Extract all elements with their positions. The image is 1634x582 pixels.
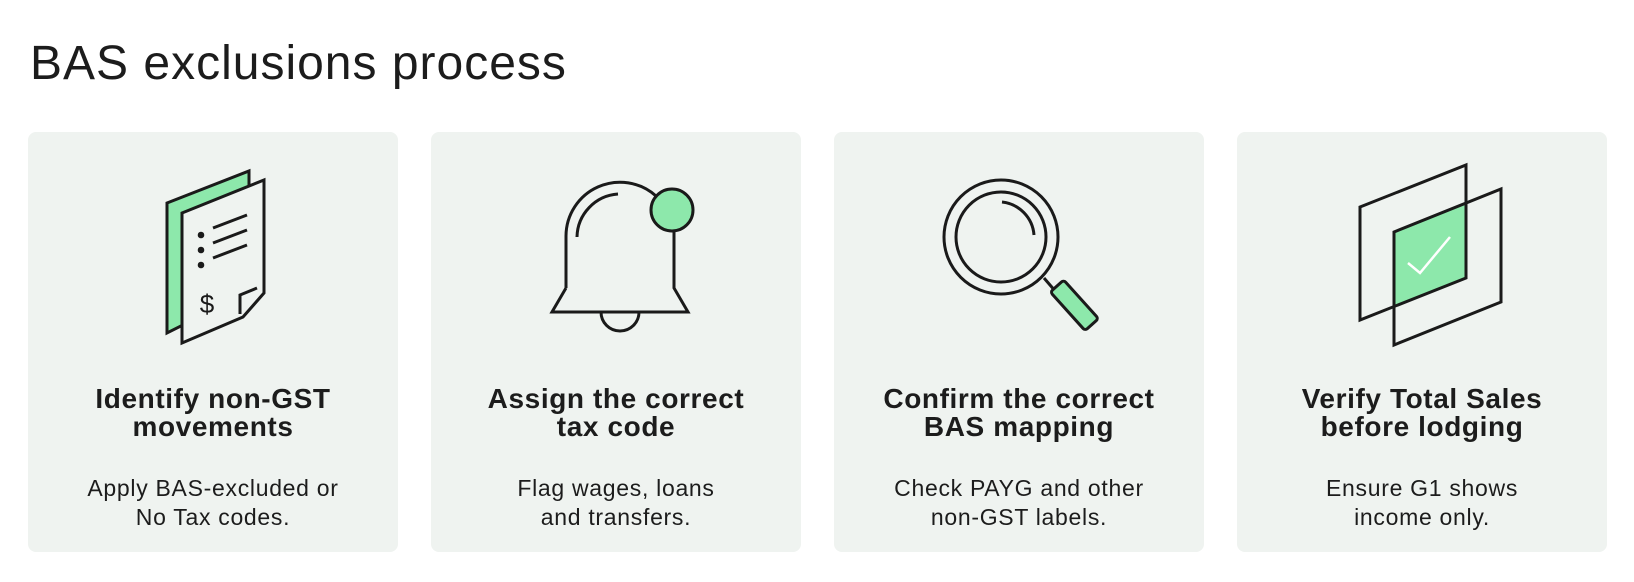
panel: confirm <box>834 132 1204 552</box>
icon: magnifier <box>942 178 1099 331</box>
heading: before lodging <box>1321 411 1523 442</box>
body text <box>87 475 339 530</box>
body text: income only. <box>1354 504 1490 530</box>
heading <box>488 383 744 442</box>
body text: and transfers. <box>541 504 691 530</box>
heading: Confirm the correct <box>883 383 1155 414</box>
body text <box>517 475 715 530</box>
panel: verify <box>1237 132 1607 552</box>
icon: bell <box>549 180 694 332</box>
heading: BAS mapping <box>924 411 1114 442</box>
heading: Assign the correct <box>488 383 744 414</box>
body text: Ensure G1 shows <box>1326 475 1518 501</box>
body text <box>1326 475 1518 530</box>
panel: assign <box>431 132 801 552</box>
body text: Apply BAS-excluded or <box>87 475 339 501</box>
body text: Flag wages, loans <box>517 475 715 501</box>
body text: non-GST labels. <box>931 504 1107 530</box>
heading <box>883 383 1155 442</box>
icon: overlapping frames with check <box>1358 162 1502 348</box>
panel: identify <box>28 132 398 552</box>
heading: Identify non-GST <box>95 383 331 414</box>
body text <box>894 475 1144 530</box>
heading <box>95 383 331 442</box>
body text: Check PAYG and other <box>894 475 1144 501</box>
icon: documents: $ <box>200 289 215 319</box>
title: BAS exclusions process <box>30 37 567 90</box>
heading <box>1302 383 1542 442</box>
icon: documents <box>166 168 266 346</box>
heading: Verify Total Sales <box>1302 383 1542 414</box>
heading: tax code <box>557 411 675 442</box>
heading: movements <box>132 411 294 442</box>
body text: No Tax codes. <box>136 504 290 530</box>
